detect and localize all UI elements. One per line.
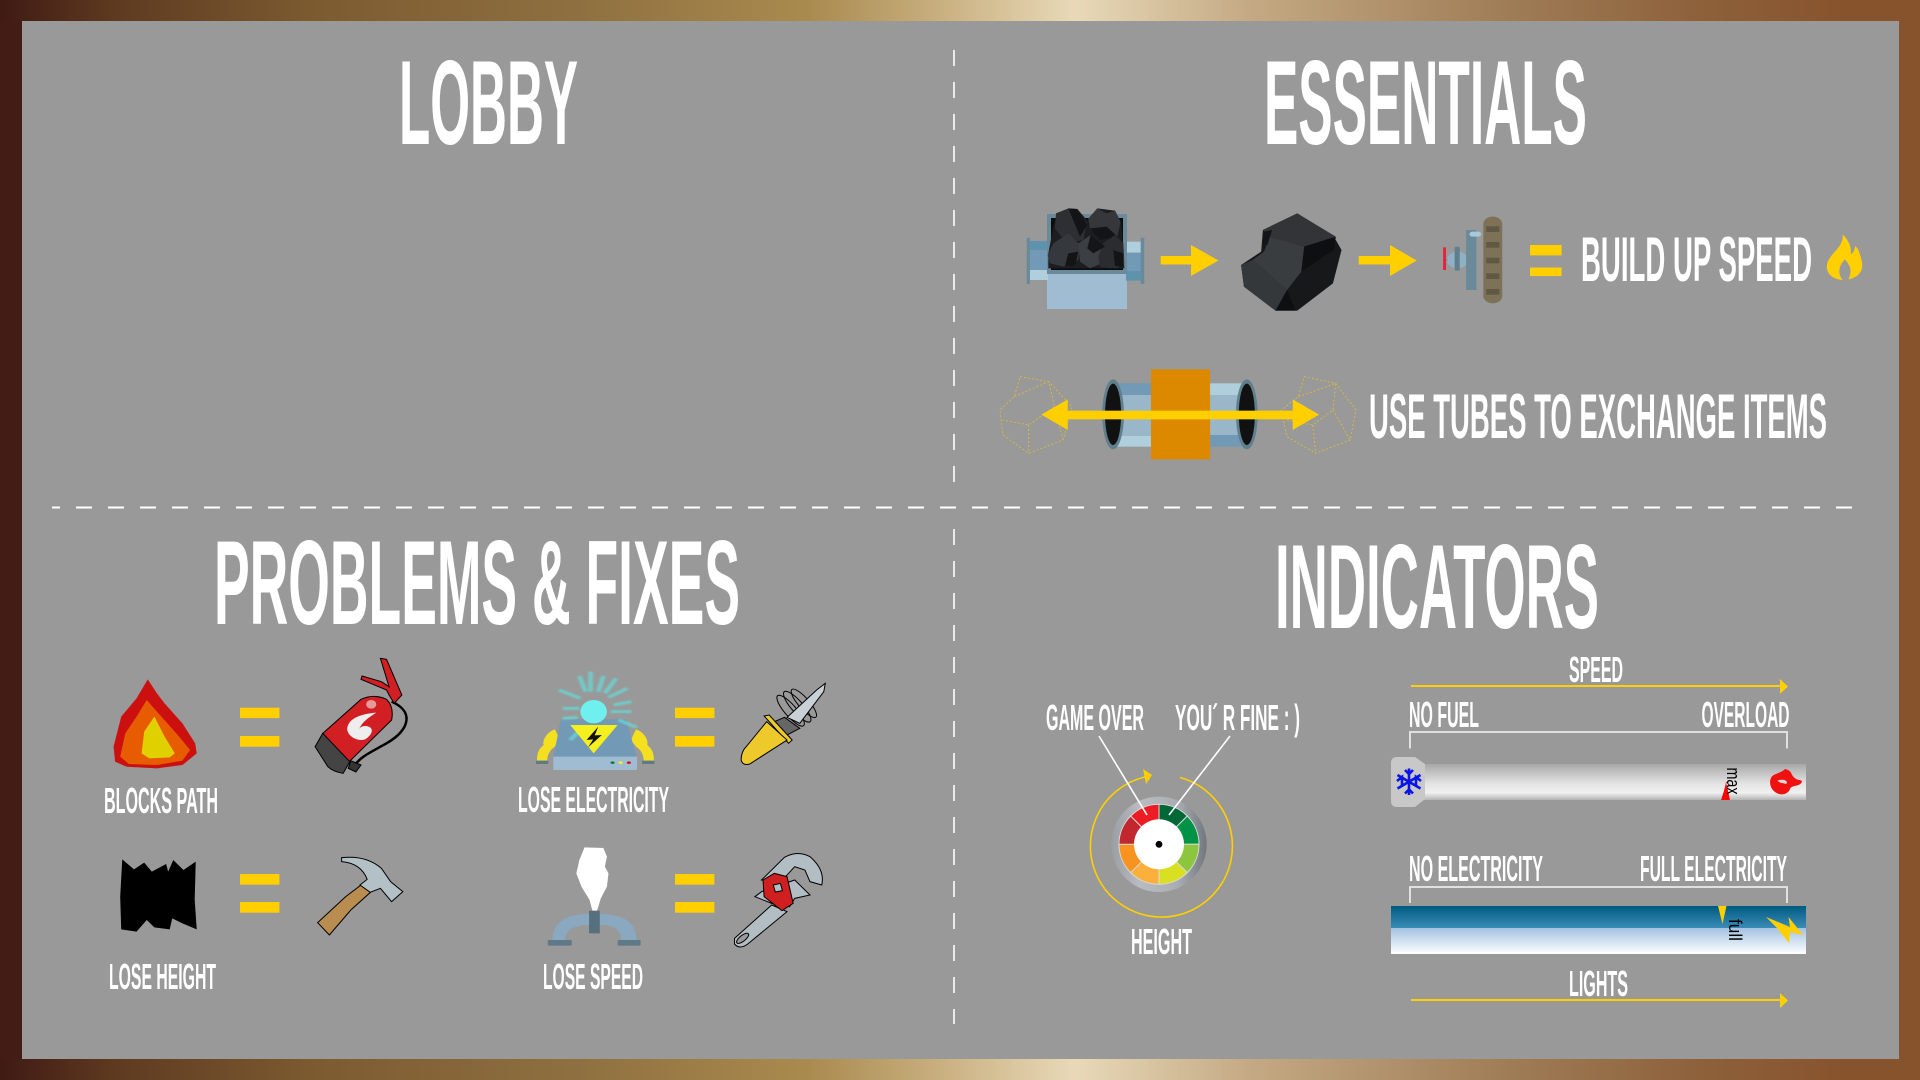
- panel: essentials: [1000, 208, 1862, 459]
- equals sign: [675, 708, 714, 747]
- icon: leaking pipe with steam: [548, 847, 641, 946]
- bracket: electricity range: [1410, 887, 1787, 903]
- panel: indicators: GAME OVER: [1046, 697, 1144, 738]
- electricity bar: [1391, 906, 1806, 954]
- right border: [1899, 21, 1920, 1059]
- panel: indicators: HEIGHT: [1131, 921, 1192, 962]
- panel: indicators: LIGHTS: [1569, 963, 1628, 1004]
- icon: broken generator: [536, 672, 654, 770]
- icon: fire: [114, 679, 197, 768]
- panel: problems and fixes: LOSE SPEED: [543, 956, 643, 997]
- panel: problems and fixes: BLOCKS PATH: [104, 780, 218, 821]
- icon: tube exchange: [1000, 369, 1356, 459]
- icon: hammer: [318, 857, 403, 935]
- speed bar: [1391, 757, 1806, 807]
- icon: coal hopper: [1027, 208, 1144, 309]
- panel: problems and fixes: [104, 658, 825, 997]
- callout lines: [1099, 736, 1230, 815]
- panel: indicators: YOU´ R FINE : ): [1175, 697, 1300, 738]
- icon: soldering iron: [741, 683, 825, 764]
- arrow: speed direction: [1411, 679, 1788, 694]
- icon: pipe wrench: [734, 853, 822, 947]
- icon: flame: [1827, 234, 1862, 280]
- electricity bar: full: [1725, 919, 1745, 941]
- icon: dark blob: [120, 859, 197, 932]
- equals sign: [240, 874, 279, 913]
- equals sign: [1530, 245, 1562, 276]
- panel: indicators: [1046, 649, 1806, 1008]
- panel: indicators: NO ELECTRICITY: [1409, 848, 1543, 889]
- speed bar: max: [1723, 768, 1743, 794]
- panel: indicators: SPEED: [1569, 649, 1623, 690]
- panel: problems and fixes: LOSE ELECTRICITY: [518, 779, 669, 820]
- arrow: lights direction: [1411, 993, 1788, 1008]
- arrow: fuel to engine: [1359, 245, 1417, 276]
- equals sign: [675, 874, 714, 913]
- icon: coal chunk: [1241, 213, 1342, 311]
- icon: engine piston: [1443, 217, 1502, 303]
- icon: fire extinguisher: [315, 658, 407, 773]
- height gauge: [1090, 769, 1232, 917]
- arrow: coal to fuel: [1161, 245, 1218, 276]
- bracket: speed range: [1410, 732, 1787, 748]
- panel: indicators: NO FUEL: [1409, 694, 1479, 735]
- equals sign: [240, 708, 279, 747]
- left border: [0, 21, 22, 1059]
- text: PROBLEMS & FIXES: [214, 516, 740, 650]
- text: LOBBY: [399, 36, 578, 170]
- panel: problems and fixes: LOSE HEIGHT: [109, 956, 216, 997]
- panel: indicators: OVERLOAD: [1702, 694, 1790, 735]
